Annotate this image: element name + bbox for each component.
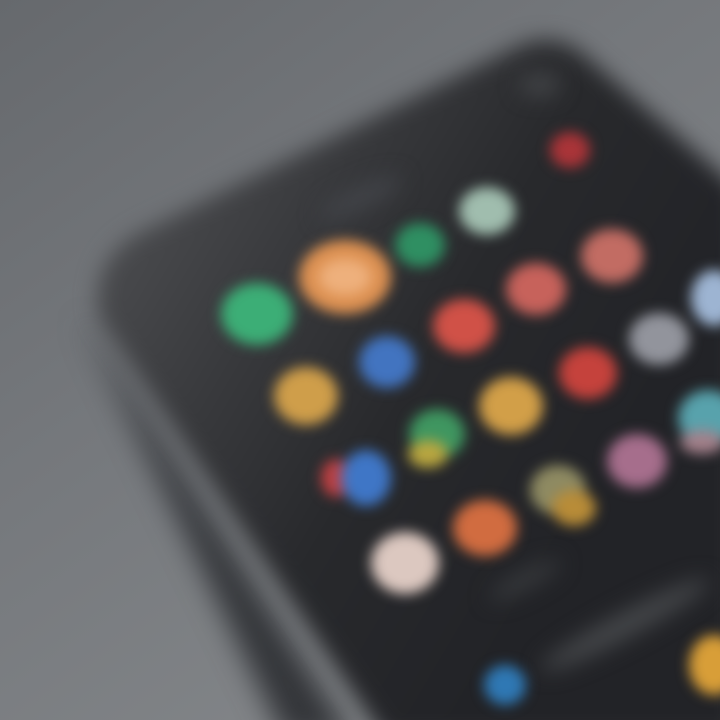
phone shadow bbox=[80, 315, 355, 720]
icon: orange bbox=[299, 240, 391, 314]
phone screen highlights bbox=[315, 75, 715, 680]
icon: blue and red bbox=[321, 450, 391, 506]
icon: orange bottom bbox=[453, 500, 517, 556]
icon: yellow left bbox=[274, 367, 338, 425]
icon: blue dock bbox=[484, 665, 526, 705]
icon: dark green bbox=[395, 223, 445, 267]
icon: green bbox=[221, 283, 293, 345]
icon: pale pink bbox=[371, 532, 439, 594]
icon: blue bbox=[359, 336, 415, 388]
icon: bright red bbox=[559, 347, 617, 399]
icon: khaki bbox=[530, 465, 596, 526]
icon: pink bbox=[607, 434, 667, 488]
icon: teal edge bbox=[678, 390, 720, 454]
icon: pale green bbox=[459, 187, 515, 235]
icon: top red bbox=[550, 132, 590, 168]
icon: salmon bbox=[581, 229, 643, 283]
icon: yellow dock bbox=[689, 635, 720, 695]
icon: grey bbox=[629, 313, 689, 365]
icon: pale blue edge bbox=[691, 270, 720, 326]
icon: green and yellow bbox=[408, 409, 465, 468]
app icons grid bbox=[221, 132, 720, 705]
icon: yellow centre bbox=[479, 377, 543, 435]
icon: rose red bbox=[506, 263, 566, 315]
icon: red bbox=[433, 299, 495, 353]
